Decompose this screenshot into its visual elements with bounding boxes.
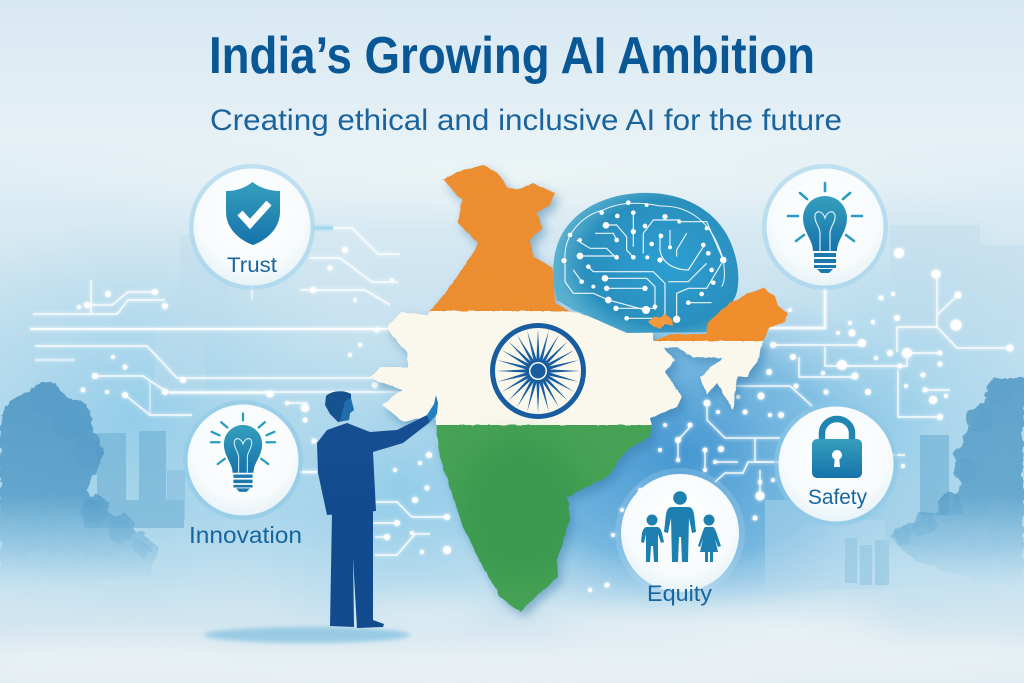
lower fog bbox=[0, 601, 1024, 683]
north-east saffron region bbox=[653, 288, 788, 341]
green band bbox=[436, 424, 652, 612]
badge: Trust bbox=[189, 164, 315, 290]
badge: Innovation bbox=[183, 400, 303, 520]
badge: Trust: Trust bbox=[227, 254, 277, 277]
icon: shield bbox=[226, 182, 280, 245]
man pointing at map bbox=[317, 391, 438, 628]
icon: padlock bbox=[812, 419, 862, 478]
Ashoka Chakra bbox=[492, 326, 584, 416]
badge: Equity bbox=[615, 468, 745, 598]
right circuit lines bbox=[678, 273, 1010, 495]
subtitle: Creating ethical and inclusive AI for the future bbox=[210, 104, 842, 137]
badge: Safety bbox=[774, 402, 898, 526]
left trees bbox=[0, 382, 158, 590]
saffron sprig over brain bbox=[648, 314, 673, 329]
saffron band bbox=[430, 165, 570, 312]
right trees bbox=[890, 377, 1024, 590]
label: Equity: Equity bbox=[647, 581, 712, 606]
badge: Safety: Safety bbox=[808, 486, 867, 509]
star dots bbox=[77, 247, 1014, 592]
title: India’s Growing AI Ambition bbox=[209, 27, 815, 85]
icon: family bbox=[641, 491, 721, 562]
upper faded skyline bbox=[155, 225, 1024, 390]
brain with circuit traces bbox=[553, 193, 738, 333]
label: Innovation: Innovation bbox=[189, 522, 302, 548]
white band bbox=[360, 311, 780, 425]
right skyline bbox=[765, 435, 949, 590]
badge: lightbulb top right bbox=[762, 164, 888, 290]
man's ground shadow bbox=[204, 627, 410, 643]
left circuit lines bbox=[30, 228, 447, 555]
left skyline bbox=[84, 431, 185, 528]
icon: lightbulb bbox=[788, 183, 862, 273]
map of India in tricolour bbox=[360, 160, 780, 620]
icon: lightbulb bbox=[211, 414, 275, 492]
